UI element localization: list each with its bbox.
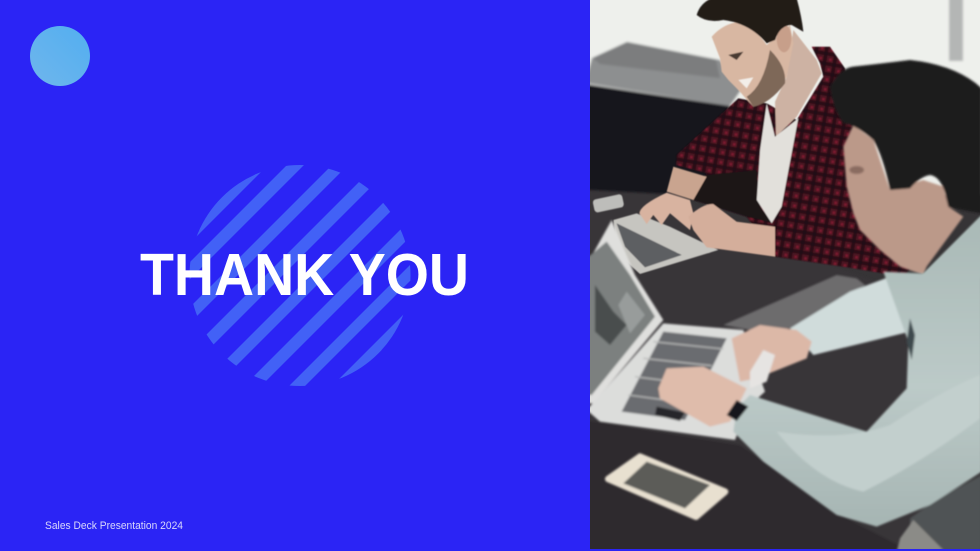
laptop lid	[587, 220, 663, 403]
open laptop and arms	[587, 215, 980, 551]
hands	[667, 167, 707, 200]
seat	[910, 475, 980, 551]
small laptop	[613, 213, 718, 274]
man in plaid shirt	[592, 0, 918, 277]
phone	[608, 457, 725, 517]
striped circle decoration	[190, 165, 410, 386]
footer text: Sales Deck Presentation 2024	[45, 520, 183, 532]
wall backdrop	[585, 0, 980, 195]
light blue circle	[30, 26, 90, 86]
far table cloth	[590, 48, 740, 108]
sleeves	[790, 277, 910, 355]
photo: two men working on laptops	[585, 0, 980, 551]
watch	[727, 400, 748, 421]
man in front	[830, 60, 980, 278]
hands	[732, 325, 812, 382]
window pole	[949, 0, 963, 61]
far table skirt	[585, 84, 730, 200]
title: THANK YOU	[140, 242, 469, 308]
table top	[590, 189, 686, 199]
